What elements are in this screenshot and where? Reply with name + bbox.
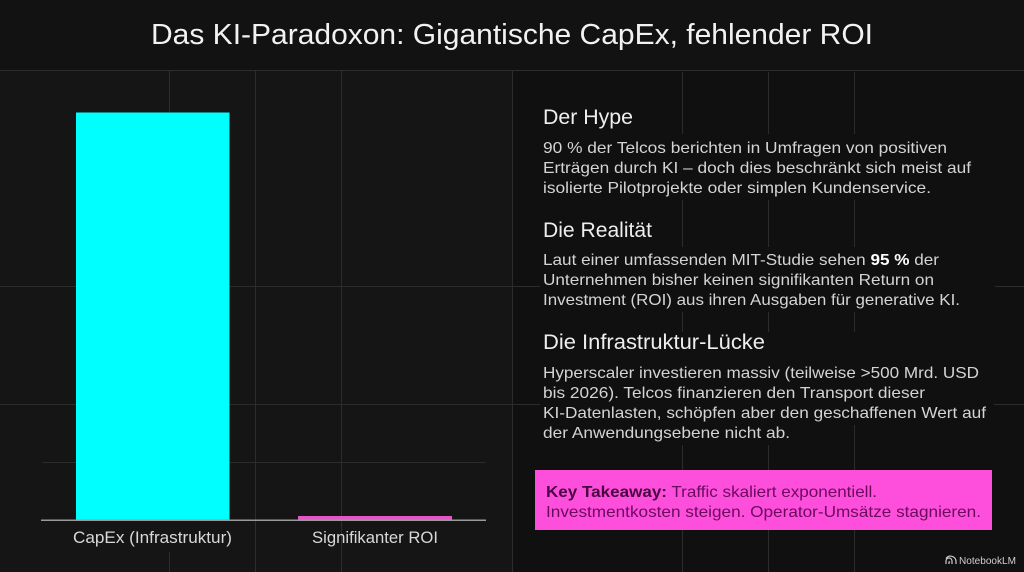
body: Die Infrastruktur-Lücke: KI-Datenlasten, schöpfen aber den geschaffenen Wert auf (543, 405, 987, 422)
body: Die Realität: Unternehmen bisher keinen signifikanten Return on (543, 272, 934, 289)
body: Die Realität: Laut einer umfassenden MIT-Studie sehen 95 % der (543, 252, 940, 269)
callout: Key Takeaway: Key Takeaway: Traffic skaliert exponentiell. (546, 484, 877, 501)
bar: ROI (298, 516, 452, 520)
heading: Die Infrastruktur-Lücke: Die Infrastruktur-Lücke (543, 331, 765, 354)
callout: Key Takeaway (535, 470, 992, 530)
body: Die Infrastruktur-Lücke: bis 2026). Telcos finanzieren den Transport dieser (543, 385, 926, 402)
axis label: CapEx: CapEx (Infrastruktur) (73, 529, 232, 547)
heading: Die Realität: Die Realität (543, 219, 652, 242)
logo: NotebookLM: NotebookLM (959, 555, 1016, 567)
body: Die Infrastruktur-Lücke: Hyperscaler investieren massiv (teilweise >500 Mrd. USD (543, 365, 979, 382)
bar: CapEx (76, 112, 230, 520)
body: Die Realität: Investment (ROI) aus ihren Ausgaben für generative KI. (543, 292, 960, 309)
icon: NotebookLM mark (946, 556, 956, 564)
body: Der Hype (543, 140, 972, 197)
body: Die Infrastruktur-Lücke: der Anwendungsebene nicht ab. (543, 425, 790, 442)
axis label: ROI: Signifikanter ROI (312, 529, 438, 547)
body: Die Infrastruktur-Lücke (543, 365, 987, 442)
chart axis (41, 520, 486, 521)
title: Das KI-Paradoxon: Gigantische CapEx, fehlender ROI (151, 19, 873, 51)
body: Der Hype: isolierte Pilotprojekte oder simplen Kundenservice. (543, 180, 931, 197)
section: Der Hype (543, 106, 972, 197)
body: Der Hype: Erträgen durch KI – doch dies beschränkt sich meist auf (543, 160, 972, 177)
bar chart: CapEx vs ROI (41, 112, 486, 547)
body: Die Realität (543, 252, 960, 309)
body: Der Hype: 90 % der Telcos berichten in Umfragen von positiven (543, 140, 947, 157)
heading: Der Hype: Der Hype (543, 106, 633, 129)
callout: Key Takeaway: Investmentkosten steigen. Operator-Umsätze stagnieren. (546, 504, 981, 521)
section: Die Infrastruktur-Lücke (543, 331, 987, 442)
section: Die Realität (543, 219, 960, 309)
